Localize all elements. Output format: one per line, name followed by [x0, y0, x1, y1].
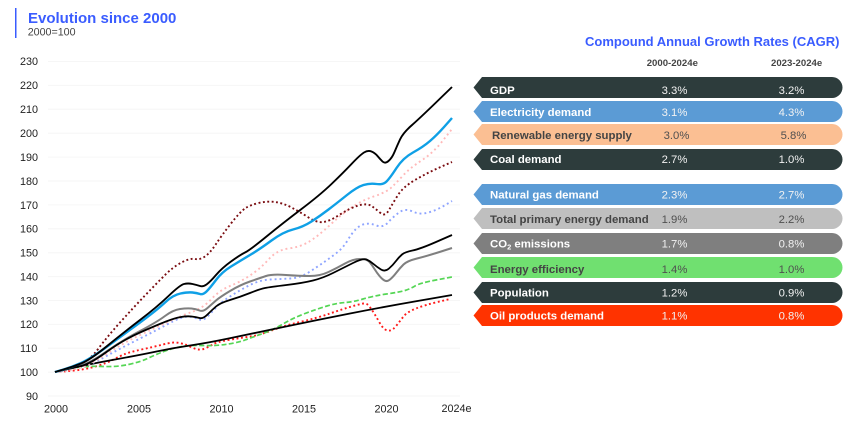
row: Renewable energy supply	[474, 124, 842, 145]
row: Energy efficiency: Energy efficiency	[490, 264, 585, 276]
y axis labels: 210	[20, 104, 38, 116]
line: total primary energy demand	[55, 248, 452, 372]
y axis labels: 190	[20, 152, 38, 164]
row: Energy efficiency	[474, 257, 842, 278]
row: Electricity demand: 4.3%	[779, 107, 804, 119]
row: Electricity demand	[474, 101, 842, 122]
row: Total primary energy demand: 2.2%	[779, 214, 804, 226]
row: Coal demand: 1.0%	[779, 154, 804, 166]
row: Energy efficiency: 1.0%	[779, 264, 804, 276]
x axis labels: 2010	[210, 404, 234, 416]
subtitle: 2000=100	[28, 27, 76, 39]
row: CO2 emissions: emissions	[511, 238, 570, 250]
row: Population: Population	[490, 288, 549, 300]
row: CO2 emissions	[474, 233, 842, 254]
table heading: Compound Annual Growth Rates (CAGR)	[585, 34, 839, 49]
y axis labels: 200	[20, 128, 38, 140]
row: GDP: GDP	[490, 85, 515, 97]
row: CO2 emissions: CO	[490, 238, 507, 250]
row: GDP: 3.3%	[662, 85, 687, 97]
x axis labels: 2005	[127, 404, 151, 416]
row: Coal demand: 2.7%	[662, 154, 687, 166]
row: Population: 0.9%	[779, 288, 804, 300]
line chart	[55, 87, 452, 372]
row: Renewable energy supply: Renewable energy supply	[492, 130, 633, 142]
y axis labels: 220	[20, 80, 38, 92]
row: Oil products demand: 1.1%	[662, 310, 687, 322]
row: Oil products demand: Oil products demand	[490, 310, 604, 322]
y axis labels: 160	[20, 224, 38, 236]
row: Natural gas demand: 2.3%	[662, 190, 687, 202]
x axis labels: 2020	[374, 404, 399, 416]
column header: 2023-2024e: 2023-2024e	[771, 58, 822, 69]
row: Oil products demand: 0.8%	[779, 310, 804, 322]
y axis labels: 170	[20, 200, 38, 212]
line: renewable energy supply	[55, 129, 452, 372]
x axis labels: 2024e	[442, 403, 472, 415]
y axis labels: 100	[20, 367, 38, 379]
row: Electricity demand: Electricity demand	[490, 107, 591, 119]
y axis labels: 120	[20, 319, 38, 331]
row: Population	[474, 282, 842, 303]
x axis labels: 2015	[292, 404, 316, 416]
row: GDP: 3.2%	[779, 85, 804, 97]
row: Total primary energy demand: Total primary energy demand	[490, 214, 649, 226]
line: electricity demand	[55, 118, 452, 372]
title accent bar	[15, 8, 16, 38]
y axis labels	[20, 56, 38, 403]
row: Natural gas demand: Natural gas demand	[490, 190, 599, 202]
row: Natural gas demand	[474, 184, 842, 205]
row: Total primary energy demand: 1.9%	[662, 214, 687, 226]
line: energy efficiency	[55, 277, 452, 372]
row: Electricity demand: 3.1%	[662, 107, 687, 119]
row: CO2 emissions: 0.8%	[779, 238, 804, 250]
y axis labels: 130	[20, 296, 38, 308]
column header: 2000-2024e: 2000-2024e	[647, 58, 698, 69]
row: CO2 emissions: 1.7%	[662, 238, 687, 250]
row: CO2 emissions: 2	[507, 242, 511, 252]
y axis labels: 110	[20, 343, 37, 355]
title: Evolution since 2000	[28, 10, 176, 27]
x axis labels	[44, 403, 472, 416]
line: population	[55, 295, 452, 372]
line: coal demand	[55, 162, 452, 372]
row: Total primary energy demand	[474, 208, 842, 229]
row: Renewable energy supply: 5.8%	[781, 130, 806, 142]
row: Coal demand	[474, 149, 842, 170]
y axis labels: 90	[26, 391, 38, 403]
y axis labels: 230	[20, 56, 38, 68]
line: natural gas demand	[55, 201, 452, 372]
row: Population: 1.2%	[662, 288, 687, 300]
row: Renewable energy supply: 3.0%	[664, 130, 689, 142]
line: CO2 emissions	[55, 235, 452, 372]
row: Coal demand: Coal demand	[490, 154, 562, 166]
y axis labels: 180	[20, 176, 38, 188]
row: Energy efficiency: 1.4%	[662, 264, 687, 276]
y axis labels: 140	[20, 272, 38, 284]
y axis labels: 150	[20, 248, 38, 260]
row: GDP	[474, 77, 842, 98]
line: oil products demand	[55, 299, 450, 372]
row: Oil products demand	[474, 305, 842, 326]
row: Natural gas demand: 2.7%	[779, 190, 804, 202]
line: GDP	[55, 87, 452, 372]
x axis labels: 2000	[44, 404, 68, 416]
